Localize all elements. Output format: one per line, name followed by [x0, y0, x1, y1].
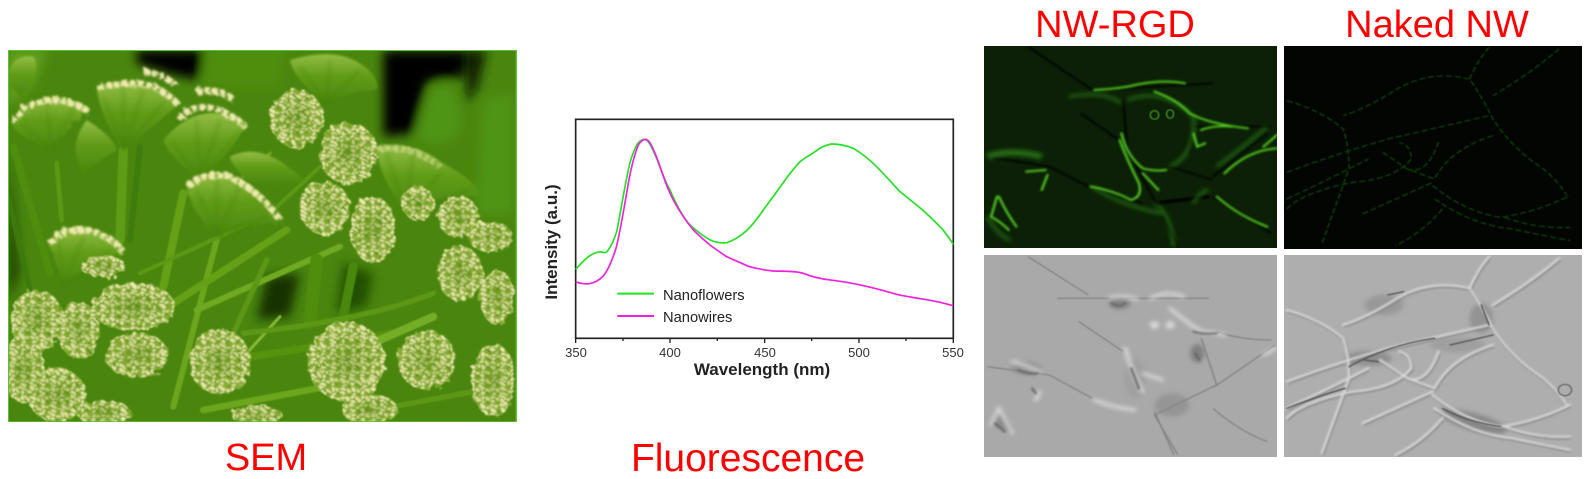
textured flower heads — [3, 89, 516, 426]
x tick labels — [565, 345, 964, 360]
x tick labels: 450 — [754, 345, 776, 360]
legend swatch: nanoflowers — [617, 291, 654, 297]
legend: nanowires: Nanowires — [663, 310, 732, 326]
label: SEM: SEM — [225, 437, 307, 479]
fan flowers with cream rims — [12, 97, 283, 287]
chart: fluorescence spectra — [542, 119, 964, 379]
curve: nanoflowers — [576, 139, 953, 269]
x tick labels: 400 — [659, 345, 681, 360]
legend swatch: nanowires — [617, 313, 654, 319]
panel: naked NW phase contrast micrograph — [1284, 255, 1582, 457]
y axis title: Intensity (a.u.) — [542, 184, 561, 300]
back flowers — [7, 54, 480, 213]
panel: NW-RGD fluorescence micrograph — [984, 46, 1277, 248]
plot frame — [576, 119, 953, 338]
panel: NW-RGD phase contrast micrograph — [984, 255, 1277, 457]
x tick labels: 500 — [848, 345, 870, 360]
fan rays — [104, 61, 415, 166]
panel: naked NW fluorescence micrograph — [1284, 46, 1582, 249]
label: NW-RGD: NW-RGD — [1035, 4, 1195, 46]
stems — [8, 147, 500, 410]
label: Naked NW: Naked NW — [1345, 4, 1529, 46]
legend: nanoflowers: Nanoflowers — [663, 288, 745, 304]
x tick labels: 350 — [565, 345, 587, 360]
x tick labels: 550 — [942, 345, 964, 360]
axis ticks — [576, 338, 953, 343]
curve: nanowires — [576, 139, 953, 306]
label: Fluorescence: Fluorescence — [631, 437, 865, 479]
panel: SEM micrograph of nanoflowers — [3, 50, 517, 426]
x axis title: Wavelength (nm) — [694, 360, 830, 379]
